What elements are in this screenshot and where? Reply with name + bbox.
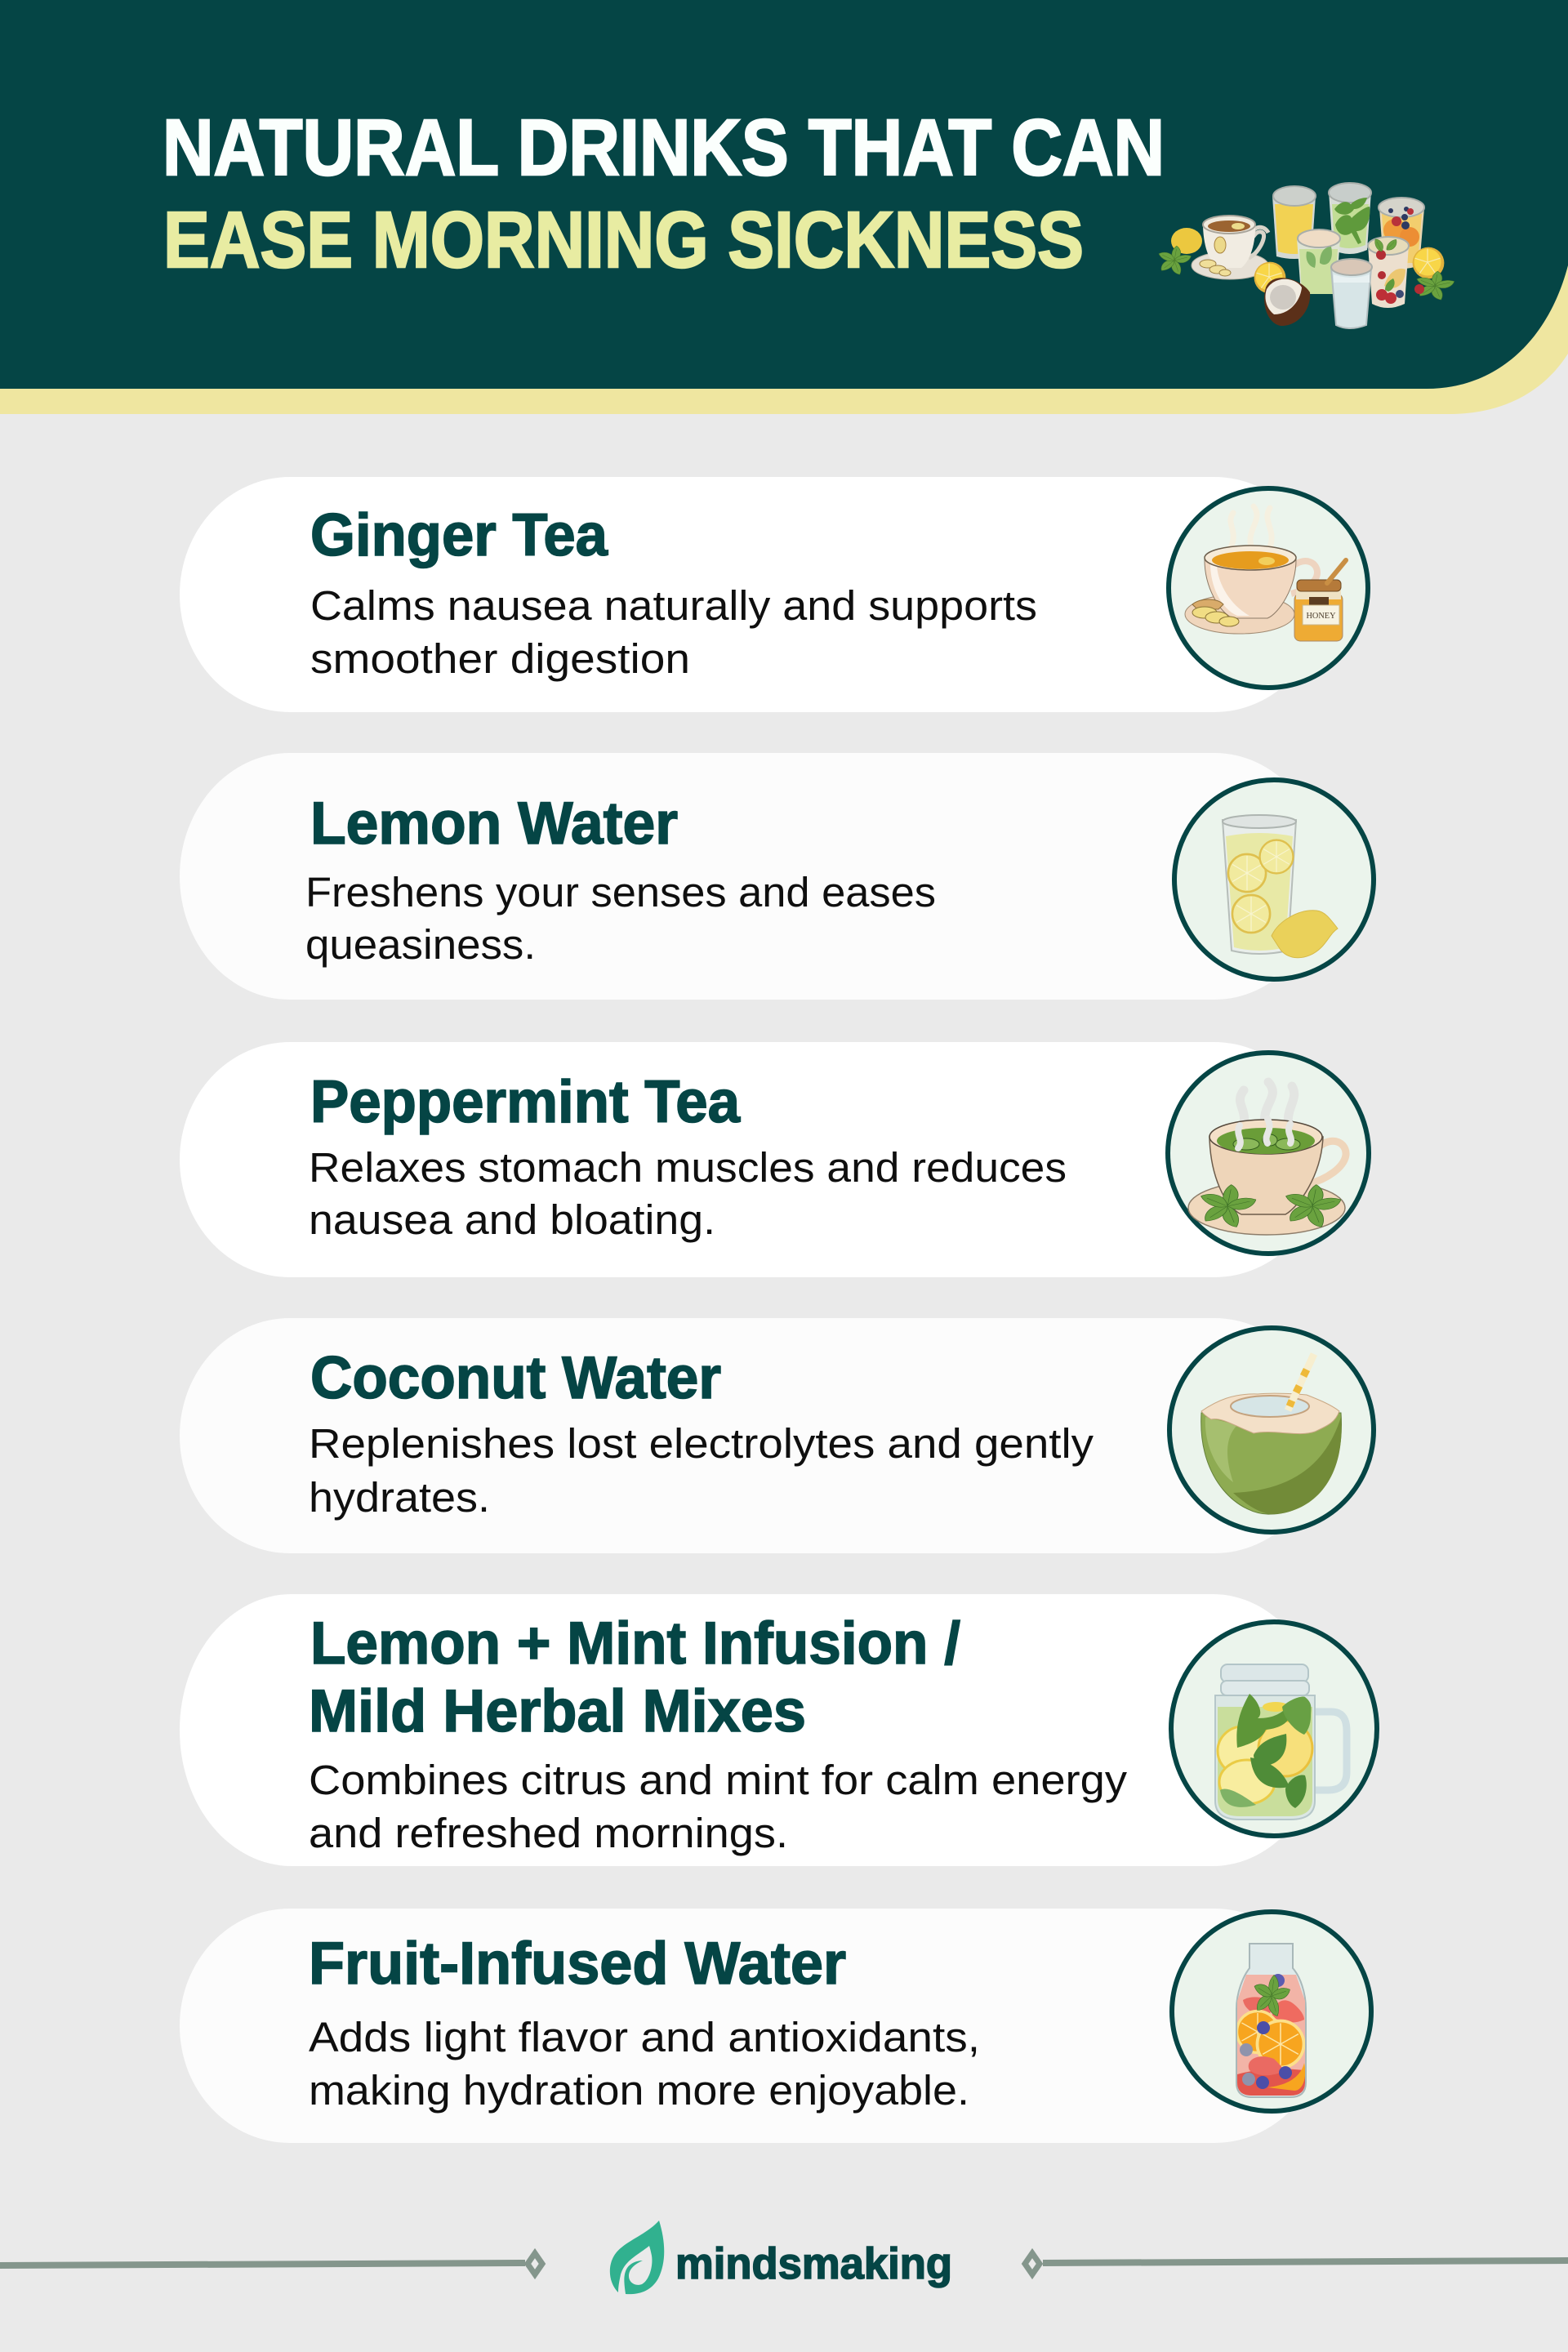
description: Fruit-Infused Water: making hydration more enjoyable. xyxy=(309,2067,969,2114)
description: Fruit-Infused Water xyxy=(309,2014,980,2114)
glass: mint green xyxy=(1329,191,1371,254)
description: Coconut Water: hydrates. xyxy=(309,1474,490,1521)
glass: berries xyxy=(1368,245,1409,308)
description: Fruit-Infused Water: Adds light flavor and antioxidants, xyxy=(309,2014,980,2060)
icon: lemon mint mason jar xyxy=(1171,1622,1377,1836)
panel: Peppermint Tea xyxy=(180,1042,1369,1277)
description: Coconut Water: Replenishes lost electrolytes and gently xyxy=(309,1420,1094,1467)
panel: Ginger Tea xyxy=(180,477,1368,712)
glass: pale mint xyxy=(1297,238,1340,294)
description: Lemon + Mint Infusion: Combines citrus and mint for calm energy xyxy=(309,1757,1128,1803)
footer divider: left xyxy=(0,2253,542,2274)
heading: Peppermint Tea: Peppermint Tea xyxy=(310,1069,741,1135)
panel: Lemon Water xyxy=(180,753,1374,1000)
description: Peppermint Tea xyxy=(309,1144,1067,1243)
heading: Lemon + Mint Infusion / Mild Herbal Mixes: Lemon + Mint Infusion / xyxy=(310,1610,960,1677)
heading: Lemon + Mint Infusion / Mild Herbal Mixes: Mild Herbal Mixes xyxy=(309,1678,806,1744)
tea cup xyxy=(1249,227,1268,258)
heading: Fruit-Infused Water: Fruit-Infused Water xyxy=(309,1931,846,1997)
wordmark: mindsmaking xyxy=(675,2239,952,2288)
heading: Lemon Water: Lemon Water xyxy=(310,791,678,857)
icon: ginger tea with honey: HONEY xyxy=(1307,611,1336,621)
panel: Lemon + Mint Infusion xyxy=(180,1594,1377,1866)
footer divider: right xyxy=(1025,2253,1568,2274)
panel: Coconut Water xyxy=(180,1318,1374,1553)
title xyxy=(163,103,1165,284)
heading: Coconut Water: Coconut Water xyxy=(310,1345,721,1411)
description: Lemon + Mint Infusion: and refreshed mornings. xyxy=(309,1810,788,1856)
description: Ginger Tea xyxy=(310,582,1037,682)
logo: mindsmaking xyxy=(610,2221,952,2294)
header illustration: assorted drinks xyxy=(1159,183,1454,328)
description: Peppermint Tea: nausea and bloating. xyxy=(309,1196,715,1243)
description: Coconut Water xyxy=(309,1420,1094,1521)
heading: Ginger Tea: Ginger Tea xyxy=(310,502,608,568)
lemon and mint left xyxy=(1171,228,1202,254)
icon: fruit-infused bottle xyxy=(1172,1912,1371,2111)
saucer xyxy=(1192,252,1268,279)
panel: Fruit-Infused Water xyxy=(180,1909,1371,2143)
glass: orange berries xyxy=(1379,208,1424,269)
header banner xyxy=(0,0,1568,414)
title: NATURAL DRINKS THAT CAN xyxy=(163,103,1165,192)
icon: ginger tea with honey xyxy=(1169,488,1368,688)
coconut xyxy=(1264,278,1310,326)
icon: peppermint tea cup xyxy=(1168,1053,1369,1254)
description: Ginger Tea: smoother digestion xyxy=(310,635,690,682)
icon: green coconut with straw xyxy=(1169,1328,1374,1532)
heading: Lemon + Mint Infusion / Mild Herbal Mixes xyxy=(309,1610,960,1744)
icon: lemon water glass xyxy=(1174,780,1374,979)
title: EASE MORNING SICKNESS xyxy=(163,195,1084,284)
description: Lemon Water xyxy=(305,869,936,968)
description: Peppermint Tea: Relaxes stomach muscles and reduces xyxy=(309,1144,1067,1191)
description: Lemon + Mint Infusion xyxy=(309,1757,1128,1856)
description: Lemon Water: Freshens your senses and eases xyxy=(305,869,936,915)
glass: yellow juice xyxy=(1272,196,1316,259)
lemon and mint right xyxy=(1413,247,1444,278)
icon: leaf xyxy=(610,2221,664,2294)
description: Ginger Tea: Calms nausea naturally and supports xyxy=(310,582,1037,629)
description: Lemon Water: queasiness. xyxy=(305,921,536,968)
glass: milky water xyxy=(1331,268,1371,328)
